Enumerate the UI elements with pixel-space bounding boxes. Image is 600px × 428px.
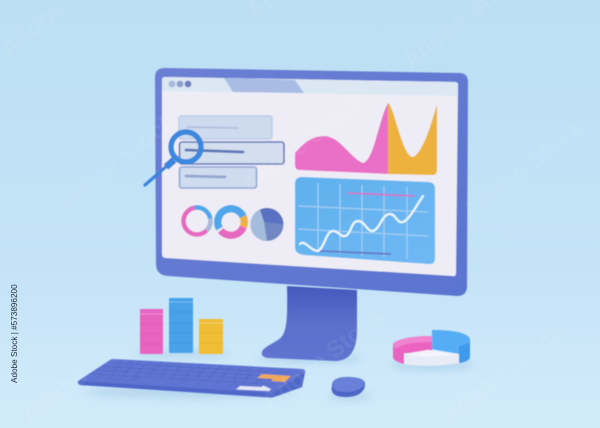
yellow area — [388, 103, 437, 175]
stock id caption: Adobe Stock | #573896200 — [10, 284, 19, 383]
blue block — [169, 298, 193, 353]
bar chart blocks — [140, 298, 223, 354]
watermarks: Adobe Stock — [457, 113, 590, 225]
magnifier icon — [145, 132, 201, 185]
white keys — [236, 386, 271, 391]
white slice — [404, 350, 459, 366]
watermarks: Adobe Stock — [49, 108, 182, 220]
keyboard — [78, 359, 305, 398]
row 2 — [180, 142, 284, 164]
area chart — [295, 103, 437, 175]
row 3 — [180, 167, 256, 188]
watermarks: Adobe Stock — [257, 303, 390, 415]
floor shadows — [85, 351, 474, 400]
grid lines — [298, 183, 428, 259]
donut chart 1 — [178, 202, 216, 240]
row 1 — [179, 116, 272, 139]
browser toolbar — [162, 77, 458, 96]
purple line — [320, 251, 391, 254]
watermarks: Adobe Stock — [237, 88, 370, 200]
pie chart — [250, 208, 284, 241]
monitor — [145, 68, 468, 296]
donut chart 2 — [213, 204, 249, 240]
key rows — [84, 360, 298, 389]
window dots — [169, 81, 191, 87]
yellow block — [199, 319, 223, 354]
toolbar tab — [224, 78, 304, 93]
list rows — [179, 116, 284, 188]
line chart panel — [295, 177, 435, 264]
screen — [162, 77, 458, 276]
pink slice — [393, 336, 432, 364]
monitor frame — [155, 68, 468, 296]
watermarks: Adobe Stock — [437, 318, 570, 428]
pink line — [347, 193, 415, 196]
mouse — [332, 377, 365, 397]
monitor stand — [262, 286, 357, 361]
trend curve — [300, 196, 423, 251]
blue slice — [432, 330, 470, 363]
keyboard body — [78, 359, 305, 398]
pink area — [295, 103, 388, 174]
watermarks: Adobe — [17, 362, 93, 428]
3D pie chart — [393, 330, 470, 366]
orange keys — [257, 374, 291, 382]
pink block — [140, 309, 163, 354]
